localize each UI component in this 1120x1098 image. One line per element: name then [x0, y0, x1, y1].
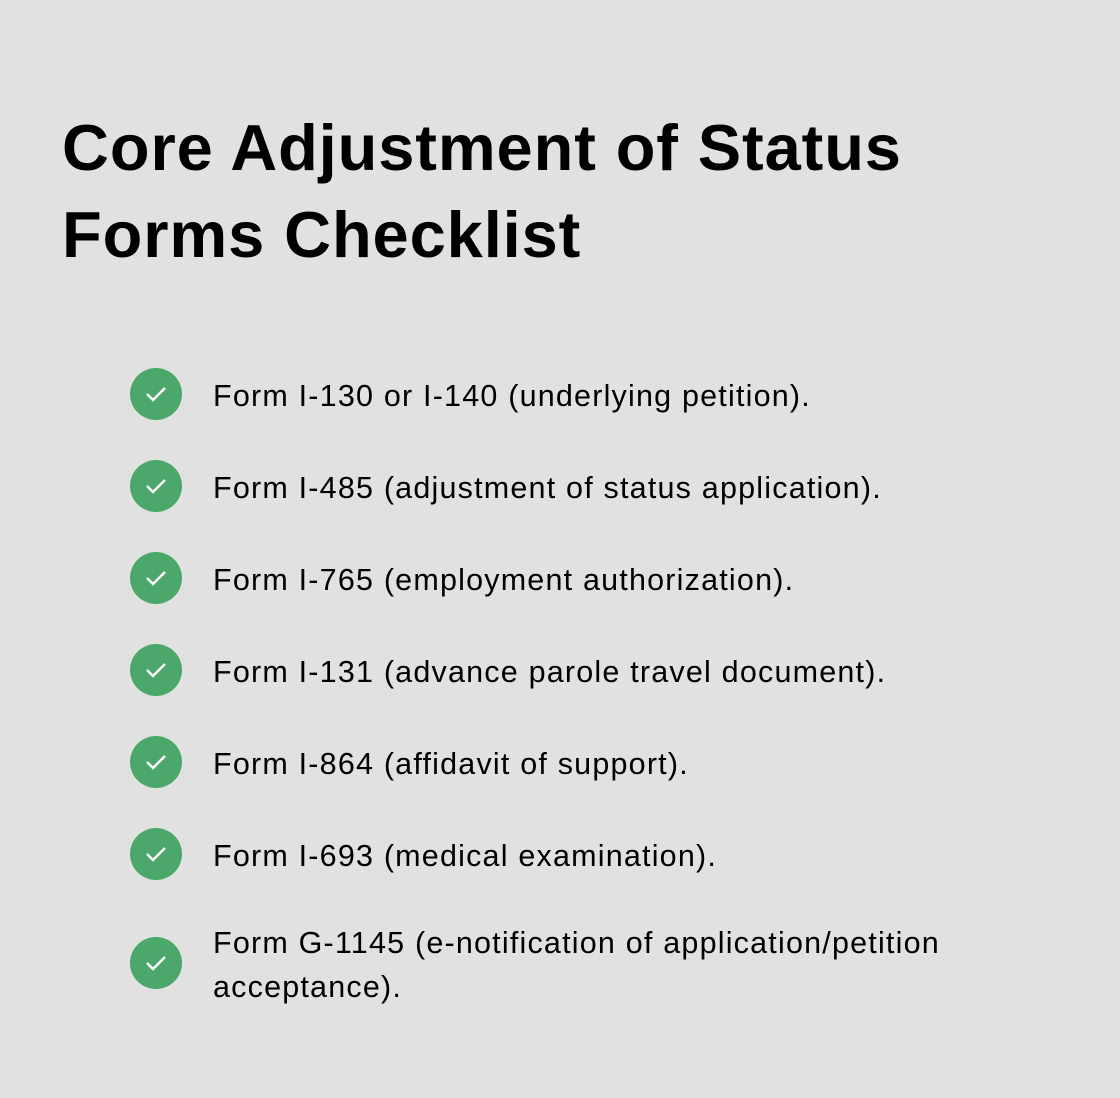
- item 6: Form I-693 (medical examination).: [213, 839, 717, 873]
- title: Core Adjustment of Status: [62, 111, 902, 184]
- item 7: Form G-1145 (e-notification of application/petition: [213, 926, 940, 960]
- item 1: Form I-130 or I-140 (underlying petition).: [213, 379, 811, 413]
- title: Forms Checklist: [62, 198, 581, 271]
- item 3: Form I-765 (employment authorization).: [213, 563, 794, 597]
- item 1: [130, 368, 811, 420]
- item 7: [130, 926, 940, 1004]
- item 5: Form I-864 (affidavit of support).: [213, 747, 689, 781]
- item 2: [130, 460, 882, 512]
- item 6: [130, 828, 717, 880]
- item 4: Form I-131 (advance parole travel document).: [213, 655, 886, 689]
- checklist: [130, 368, 940, 1004]
- item 7: acceptance).: [213, 970, 402, 1004]
- title: [62, 111, 902, 271]
- item 3: [130, 552, 794, 604]
- item 5: [130, 736, 689, 788]
- item 2: Form I-485 (adjustment of status application).: [213, 471, 882, 505]
- item 4: [130, 644, 886, 696]
